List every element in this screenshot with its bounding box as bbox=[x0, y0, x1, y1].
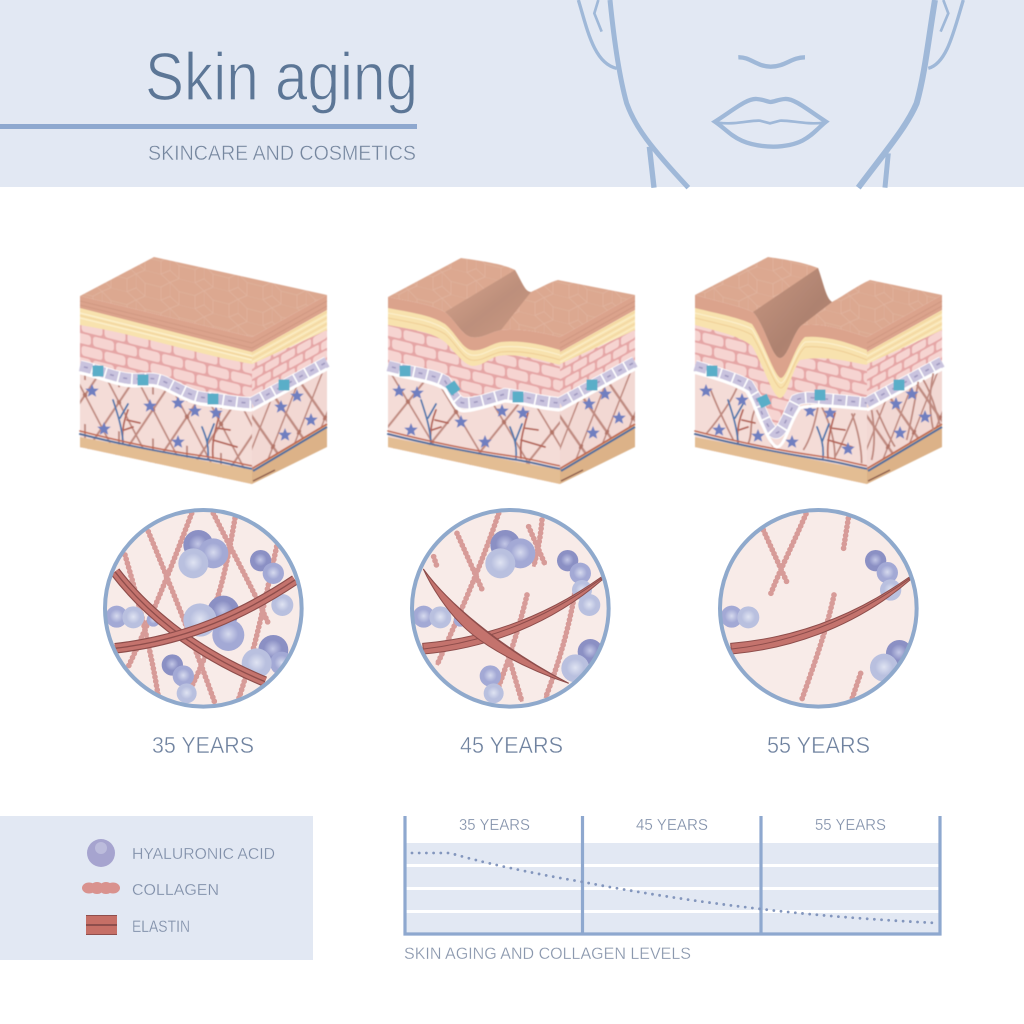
icon: hyaluronic acid bbox=[87, 839, 115, 867]
skin block: 45 years bbox=[388, 258, 635, 484]
collagen level chart bbox=[405, 816, 940, 934]
header banner bbox=[0, 0, 1024, 188]
magnified circle: 45 years bbox=[412, 510, 609, 707]
chart column label: 35 years: 35 YEARS bbox=[459, 817, 530, 834]
chart column label: 55 years: 55 YEARS bbox=[815, 817, 886, 834]
dotted collagen curve bbox=[412, 853, 936, 923]
title rule bbox=[0, 124, 417, 129]
legend label: hyaluronic acid: HYALURONIC ACID bbox=[132, 846, 275, 863]
skin block: 55 years bbox=[695, 257, 942, 484]
legend label: collagen: COLLAGEN bbox=[132, 882, 219, 899]
legend label: elastin: ELASTIN bbox=[132, 917, 190, 936]
legend panel bbox=[0, 816, 313, 960]
face line drawing bbox=[578, 0, 963, 188]
magnified circle: 35 years bbox=[105, 510, 302, 707]
age label: 55 years: 55 YEARS bbox=[767, 732, 870, 758]
title: Skin aging bbox=[145, 39, 418, 115]
chart column label: 45 years: 45 YEARS bbox=[636, 817, 708, 834]
age label: 35 years: 35 YEARS bbox=[152, 732, 254, 758]
icon: collagen bbox=[82, 882, 120, 894]
icon: elastin bbox=[86, 915, 117, 935]
magnified circle: 55 years bbox=[720, 510, 917, 707]
chart caption: SKIN AGING AND COLLAGEN LEVELS bbox=[404, 945, 691, 963]
skin block: 35 years bbox=[80, 257, 327, 484]
subtitle: SKINCARE AND COSMETICS bbox=[148, 142, 416, 165]
age label: 45 years: 45 YEARS bbox=[460, 732, 563, 758]
